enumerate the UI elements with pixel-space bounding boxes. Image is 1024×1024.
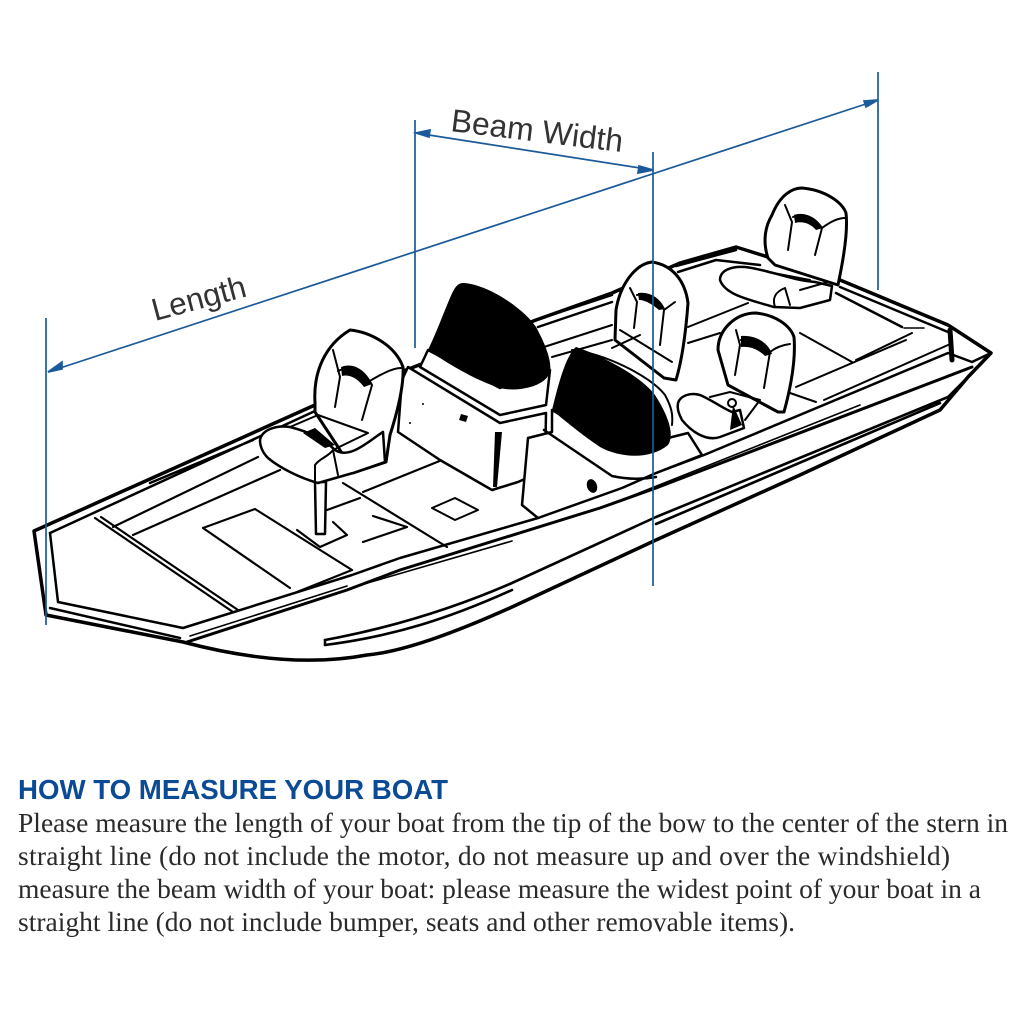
instructions text block	[18, 807, 1008, 937]
measurement guide lines	[46, 72, 878, 625]
label: Beam Width: Beam Width	[449, 102, 625, 159]
label: Length: Length	[147, 268, 250, 328]
boat line drawing	[34, 188, 991, 660]
seat: forward right	[678, 313, 794, 438]
seat: front pedestal	[260, 330, 403, 534]
instructions text block: Please measure the length of your boat from the tip of the bow to the center of the stern in	[18, 807, 1008, 838]
console and windshield: port	[398, 283, 550, 490]
heading: HOW TO MEASURE YOUR BOAT	[18, 774, 448, 805]
seat: middle	[612, 262, 688, 380]
seat back	[315, 330, 403, 473]
seat: rear	[720, 188, 847, 308]
pedestal post	[315, 482, 326, 534]
seat cushion	[260, 427, 385, 483]
deck panels	[95, 303, 948, 612]
instructions text block: measure the beam width of your boat: please measure the widest point of your boat in a	[18, 873, 981, 904]
instructions text block: straight line (do not include bumper, seats and other removable items).	[18, 906, 795, 937]
hull	[34, 247, 991, 660]
instructions text block: straight line (do not include the motor, do not measure up and over the windshield)	[18, 840, 950, 871]
console and windshield: starboard	[522, 347, 702, 518]
